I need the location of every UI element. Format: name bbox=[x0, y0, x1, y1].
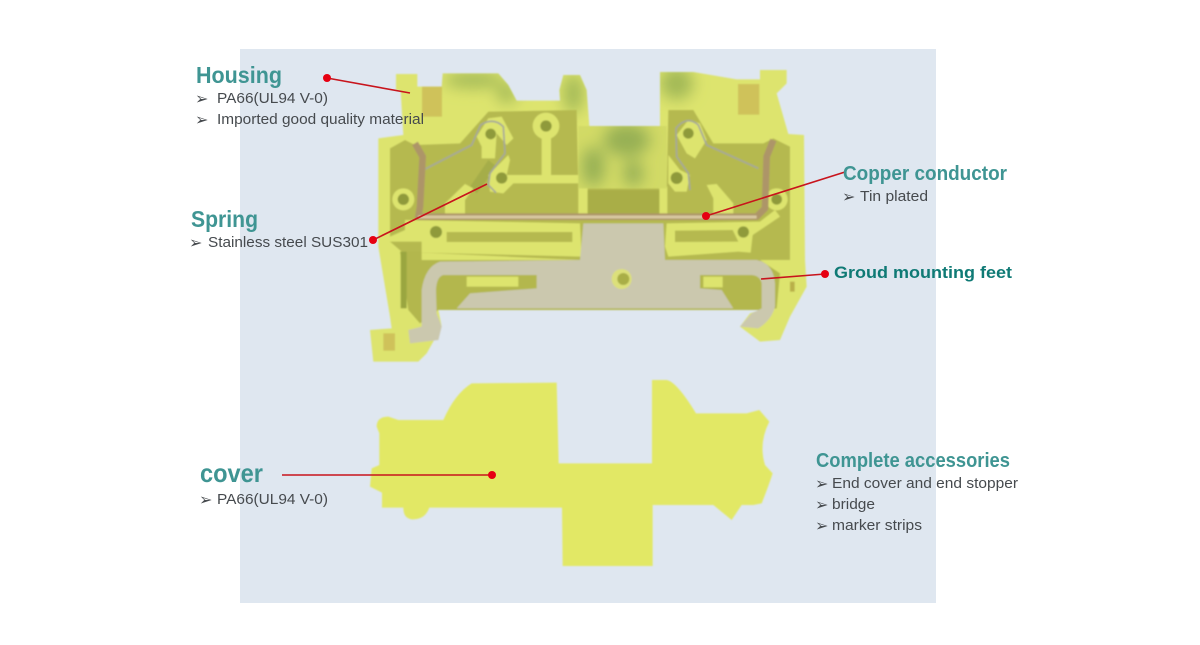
callout line: housing bbox=[323, 74, 410, 93]
copper conductor bbox=[415, 140, 773, 217]
terminal block housing photo bbox=[370, 67, 807, 362]
interior cavity bbox=[390, 110, 790, 260]
text block: copper conductor: Tin plated bbox=[860, 189, 928, 205]
text block: spring: ➢ bbox=[189, 233, 202, 252]
callout line: cover bbox=[282, 471, 496, 479]
pockets bbox=[422, 87, 442, 117]
text block: housing: ➢ bbox=[195, 89, 208, 108]
text block: housing: Housing bbox=[196, 62, 282, 88]
holes bbox=[398, 120, 782, 238]
callout line: mounting feet bbox=[761, 270, 829, 279]
green mottling bbox=[443, 67, 693, 113]
callout line: copper conductor bbox=[702, 172, 845, 220]
text block: complete accessories: ➢ bbox=[815, 495, 828, 514]
callout line: spring bbox=[369, 184, 487, 244]
text block: cover bbox=[199, 458, 328, 509]
text block: complete accessories: marker strips bbox=[832, 518, 922, 534]
text block: housing: ➢ bbox=[195, 110, 208, 129]
metal mounting foot bbox=[408, 223, 775, 343]
text block: housing: PA66(UL94 V-0) bbox=[217, 91, 328, 107]
text block: complete accessories bbox=[815, 450, 1018, 535]
center block bbox=[578, 126, 667, 188]
photo background panel bbox=[240, 49, 936, 603]
text block: ground mounting feet: Groud mounting feet bbox=[834, 263, 1012, 282]
text block: complete accessories: bridge bbox=[832, 497, 875, 513]
slots bbox=[447, 232, 572, 242]
text block: housing bbox=[195, 62, 424, 129]
text block: spring: Stainless steel SUS301 bbox=[208, 235, 368, 251]
end cover yellow part bbox=[370, 380, 773, 566]
text block: cover: cover bbox=[200, 458, 263, 488]
text block: spring bbox=[189, 206, 368, 252]
housing body bbox=[370, 70, 807, 362]
text block: complete accessories: Complete accessories bbox=[816, 450, 1010, 472]
yellow slots and center rivet bbox=[467, 277, 518, 287]
text block: housing: Imported good quality material bbox=[217, 112, 424, 128]
text block: cover: PA66(UL94 V-0) bbox=[217, 492, 328, 508]
text block: copper conductor: Copper conductor bbox=[843, 163, 1007, 185]
text block: complete accessories: ➢ bbox=[815, 516, 828, 535]
text block: copper conductor: ➢ bbox=[842, 187, 855, 206]
text block: complete accessories: ➢ bbox=[815, 474, 828, 493]
text block: spring: Spring bbox=[191, 206, 258, 232]
text block: copper conductor bbox=[842, 163, 1007, 206]
springs bbox=[423, 121, 758, 193]
text block: cover: ➢ bbox=[199, 490, 212, 509]
left ribs bbox=[390, 113, 667, 257]
right ribs bbox=[665, 120, 788, 257]
text block: complete accessories: End cover and end stopper bbox=[832, 476, 1018, 492]
